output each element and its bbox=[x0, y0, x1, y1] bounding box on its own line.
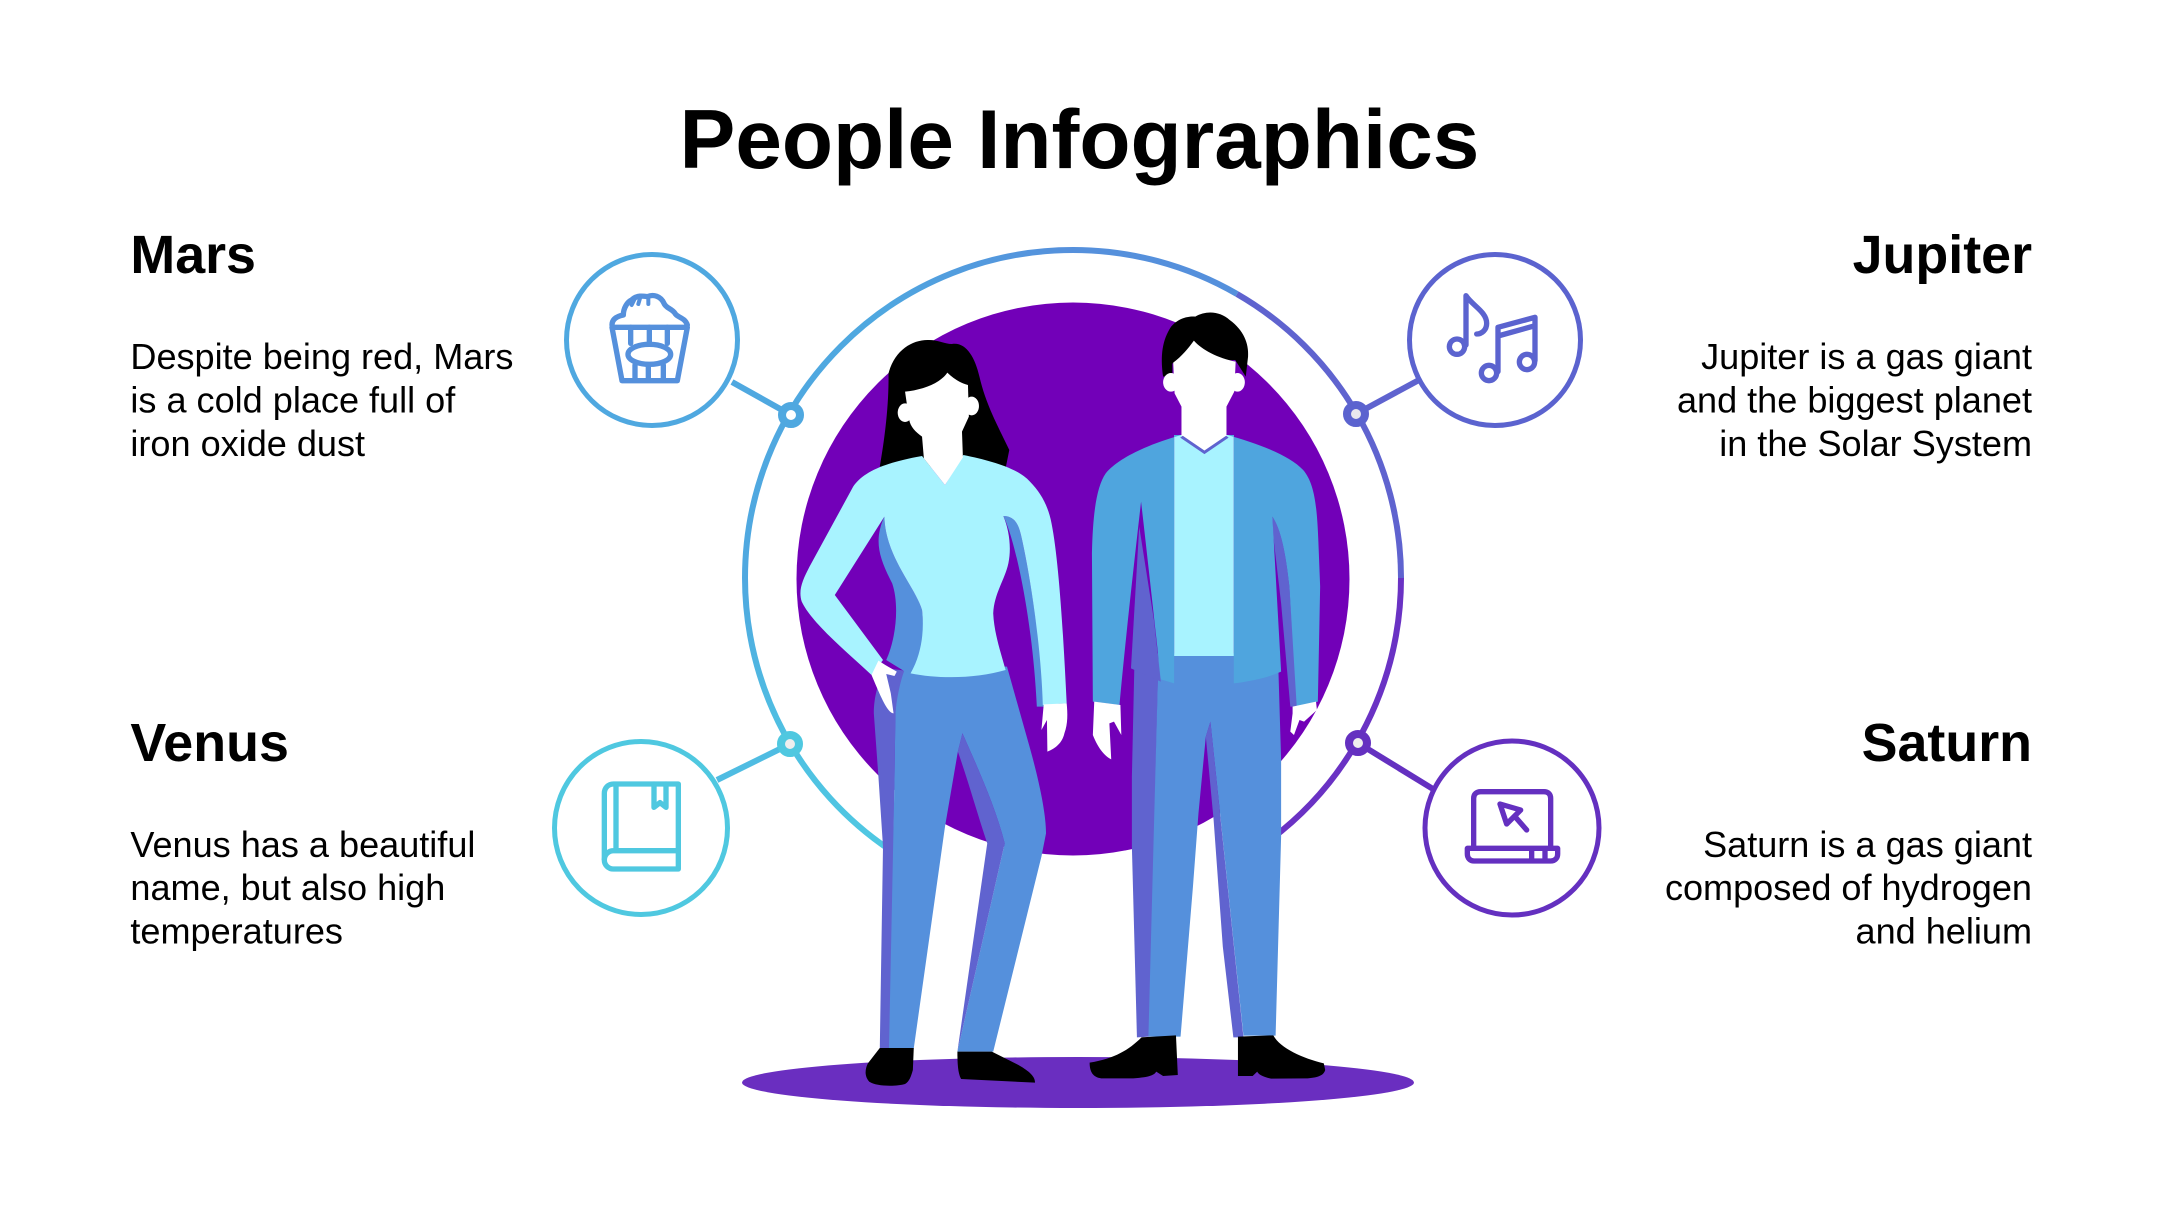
woman trousers bbox=[874, 667, 1046, 1052]
panel: Saturn text: Saturn bbox=[1862, 713, 2032, 773]
icon: popcorn in circle bbox=[566, 254, 738, 426]
panel: Jupiter text bbox=[1677, 225, 2032, 464]
woman back arm shade bbox=[1003, 516, 1045, 707]
panel: Jupiter text: and the biggest planet bbox=[1677, 380, 2032, 420]
man jacket left bbox=[1092, 435, 1181, 705]
panel: Saturn text: Saturn is a gas giant bbox=[1703, 824, 2032, 865]
man collar bbox=[1181, 437, 1227, 452]
panel: Saturn text: and helium bbox=[1856, 910, 2032, 952]
icon: book in circle bbox=[554, 742, 728, 914]
woman shoes bbox=[866, 1048, 1035, 1086]
panel: Venus text: Venus has a beautiful bbox=[130, 824, 475, 865]
icon: music notes in circle bbox=[1410, 254, 1580, 426]
man jacket shade bbox=[1131, 527, 1161, 682]
man hands bbox=[1093, 702, 1317, 759]
panel: Mars text bbox=[130, 225, 513, 464]
panel: Jupiter text: in the Solar System bbox=[1719, 423, 2032, 464]
woman face bbox=[898, 373, 979, 485]
woman sweater bbox=[800, 455, 1067, 705]
figure: man bbox=[1090, 313, 1325, 1079]
connector: Saturn bbox=[1349, 734, 1433, 789]
man face bbox=[1163, 341, 1245, 452]
panel: Saturn text bbox=[1665, 713, 2032, 952]
woman hair bbox=[880, 340, 1009, 468]
man hair bbox=[1162, 313, 1248, 377]
man shirt bbox=[1174, 435, 1234, 656]
panel: Venus text: temperatures bbox=[130, 910, 343, 952]
panel: Mars text: Despite being red, Mars bbox=[130, 336, 513, 377]
purple circle bbox=[796, 302, 1350, 856]
panel: Venus text: name, but also high bbox=[130, 867, 445, 908]
man shoes bbox=[1090, 1035, 1325, 1079]
man trousers bbox=[1132, 653, 1281, 1037]
man jacket right bbox=[1227, 435, 1320, 707]
woman hip hand bbox=[872, 661, 897, 713]
connector: Jupiter bbox=[1347, 380, 1419, 423]
woman side hand bbox=[1041, 703, 1067, 752]
connector: Venus bbox=[717, 735, 799, 780]
panel: Mars text: is a cold place full of bbox=[130, 380, 456, 420]
panel: Mars text: Mars bbox=[130, 225, 256, 285]
woman torso shade bbox=[879, 517, 923, 675]
icon: laptop in circle bbox=[1425, 741, 1599, 915]
panel: Venus text bbox=[130, 713, 475, 952]
outer ring bbox=[745, 250, 1401, 850]
connector: Mars bbox=[732, 382, 800, 424]
figure: woman bbox=[800, 340, 1067, 1086]
man right arm shade bbox=[1272, 517, 1298, 707]
panel: Jupiter text: Jupiter bbox=[1853, 225, 2032, 285]
panel: Saturn text: composed of hydrogen bbox=[1665, 867, 2032, 908]
panel: Jupiter text: Jupiter is a gas giant bbox=[1701, 336, 2032, 377]
panel: Mars text: iron oxide dust bbox=[130, 423, 365, 464]
panel: Venus text: Venus bbox=[130, 713, 289, 773]
title: People Infographics bbox=[680, 92, 1479, 186]
ground shadow bbox=[742, 1057, 1414, 1108]
